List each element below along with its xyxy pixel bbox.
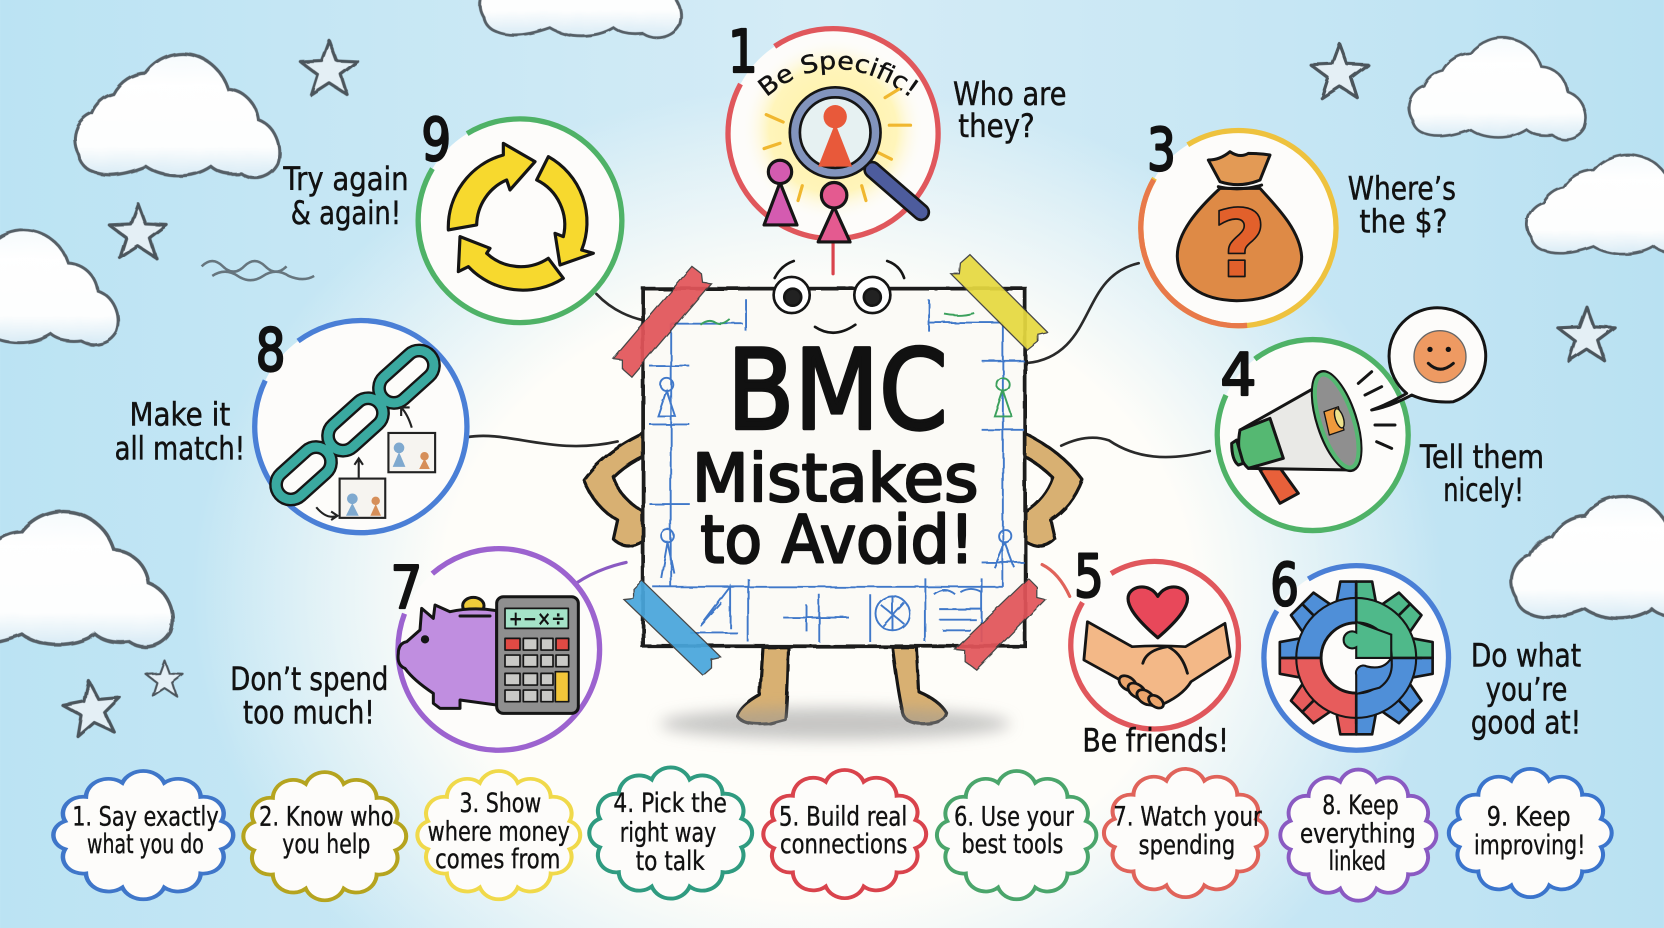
mascot face xyxy=(774,261,904,333)
magnifying glass xyxy=(795,92,921,212)
cloud 7: spending xyxy=(1104,769,1267,897)
calculator screen text: +−×÷ xyxy=(509,606,565,630)
number 5: 5 xyxy=(1074,542,1104,610)
yellow arrows xyxy=(448,143,593,290)
number 4: 4 xyxy=(1220,341,1256,409)
megaphone handle xyxy=(1260,463,1298,503)
squiggle xyxy=(202,261,314,280)
label: who are they xyxy=(953,75,1067,145)
hands xyxy=(1084,622,1230,711)
label: do what you're good at: you’re xyxy=(1486,670,1567,708)
gear ring quadrants xyxy=(1308,610,1404,706)
cloud 9: improving xyxy=(1449,769,1612,897)
label: do what you're good at: good at! xyxy=(1471,703,1581,741)
pink figures xyxy=(764,160,850,242)
cloud 2: know who xyxy=(243,772,406,900)
label: try again xyxy=(283,160,409,232)
cloud 6: best tools xyxy=(937,771,1096,899)
label: tell them nicely: Tell them xyxy=(1419,438,1544,476)
cloud 2: know who: you help xyxy=(282,829,370,860)
canvas grid sketch xyxy=(649,299,1024,642)
step 4: megaphone xyxy=(1217,308,1486,531)
gear xyxy=(1280,582,1433,734)
label: do what you're good at: Do what xyxy=(1471,636,1581,674)
bottom summary clouds xyxy=(53,767,1612,901)
right leg xyxy=(892,647,947,724)
cloud 9: improving: improving! xyxy=(1474,830,1585,861)
step 8: chain xyxy=(255,316,467,533)
step 5: handshake xyxy=(1071,542,1238,729)
label: who are they: they? xyxy=(958,107,1035,145)
title: Mistakes xyxy=(692,440,978,517)
number 8: 8 xyxy=(256,316,285,384)
label: where's the money xyxy=(1348,170,1456,240)
cloud 5: real connections xyxy=(763,770,926,898)
heart xyxy=(1128,587,1187,638)
cloud 3: money xyxy=(417,771,580,899)
cloud 8: linked: everything xyxy=(1300,819,1416,850)
label: don't spend too much: Don’t spend xyxy=(230,660,388,698)
step 9: cycle arrows xyxy=(418,106,622,323)
tape strips xyxy=(613,255,1047,675)
cloud 7: spending: spending xyxy=(1139,830,1235,861)
title: BMC xyxy=(727,328,948,456)
cloud 1: say exactly: 1. Say exactly xyxy=(72,802,219,833)
small canvases xyxy=(340,433,435,518)
cloud 5: real connections: connections xyxy=(780,829,907,860)
label: make it all match: all match! xyxy=(115,429,245,467)
title xyxy=(692,328,978,578)
calculator xyxy=(497,597,578,713)
step 7: piggy bank and calculator xyxy=(391,549,600,750)
cloud 4: right way: right way xyxy=(620,818,716,849)
label: be friends: Be friends! xyxy=(1082,721,1229,759)
ground shadow xyxy=(660,708,1010,740)
cloud 5: real connections: 5. Build real xyxy=(779,802,907,833)
label: make it all match: Make it xyxy=(130,396,230,434)
small arrows xyxy=(316,407,412,520)
bag xyxy=(1177,152,1302,301)
number 6: 6 xyxy=(1270,551,1299,619)
cloud 4: right way: 4. Pick the xyxy=(613,788,727,819)
curved label: Be Specific! xyxy=(757,54,918,96)
piggy bank xyxy=(463,597,484,614)
cloud 4: right way xyxy=(589,767,752,899)
gear teeth xyxy=(1280,582,1433,734)
number 9: 9 xyxy=(421,106,451,174)
question mark: ? xyxy=(1213,191,1267,300)
number 3: 3 xyxy=(1147,116,1176,184)
connector lines xyxy=(467,242,1210,596)
label: don't spend too much xyxy=(230,660,388,732)
label: don't spend too much: too much! xyxy=(243,694,375,732)
clouds xyxy=(0,0,1664,647)
cloud 1: say exactly xyxy=(53,771,233,899)
step 3: money bag xyxy=(1141,116,1336,326)
number 1: 1 xyxy=(728,18,758,86)
label: make it all match xyxy=(115,396,245,467)
label: do what you're good at xyxy=(1471,636,1581,741)
label: try again: & again! xyxy=(291,194,401,232)
number 7: 7 xyxy=(391,554,422,622)
label: where's the money: Where’s xyxy=(1348,170,1456,208)
cloud 8: linked xyxy=(1280,770,1436,901)
label: tell them nicely: nicely! xyxy=(1443,471,1524,509)
label: where's the money: the $? xyxy=(1359,202,1447,240)
label: tell them nicely xyxy=(1419,438,1544,509)
label: who are they: Who are xyxy=(953,75,1067,113)
cloud 6: best tools: 6. Use your xyxy=(954,802,1074,833)
cloud 1: say exactly: what you do xyxy=(87,829,204,860)
cloud 2: know who: 2. Know who xyxy=(259,802,394,833)
puzzle piece xyxy=(1344,622,1391,658)
step 6: gear puzzle xyxy=(1264,551,1449,750)
stars xyxy=(60,40,1615,738)
title: to Avoid! xyxy=(700,501,974,578)
panel: central BMC board xyxy=(643,261,1025,646)
mascot: arms and legs xyxy=(584,433,1082,724)
rays xyxy=(764,89,911,201)
left arm xyxy=(584,433,644,546)
speech bubble with smiley xyxy=(1372,308,1486,410)
cloud 3: money: 3. Show xyxy=(460,788,541,819)
cloud 8: linked: 8. Keep xyxy=(1322,790,1399,821)
chain links xyxy=(270,344,440,506)
right arm xyxy=(1024,433,1082,546)
cloud 8: linked: linked xyxy=(1329,846,1386,877)
megaphone cone xyxy=(1240,387,1353,470)
cloud 9: improving: 9. Keep xyxy=(1487,802,1571,833)
cloud 7: spending: 7. Watch your xyxy=(1113,802,1262,833)
cloud 3: money: where money xyxy=(428,816,570,847)
cloud 6: best tools: best tools xyxy=(961,829,1063,860)
label: try again: Try again xyxy=(283,160,409,198)
left leg xyxy=(738,647,788,724)
cloud 3: money: comes from xyxy=(435,844,560,875)
cloud 4: right way: to talk xyxy=(636,846,705,877)
step 1: be specific xyxy=(692,18,960,282)
